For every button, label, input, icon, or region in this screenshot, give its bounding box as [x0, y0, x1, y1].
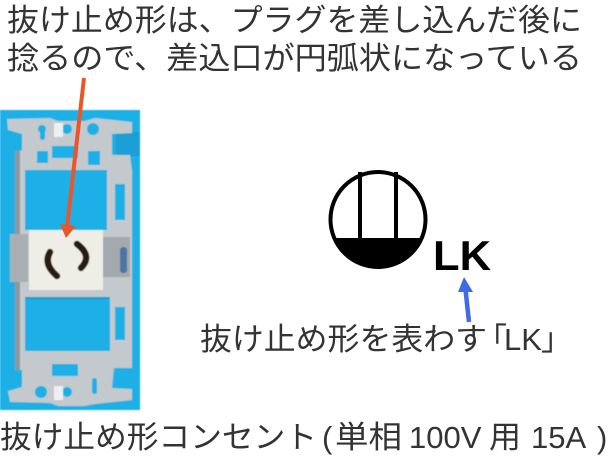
caption: outlet name and rating: 用	[489, 420, 521, 455]
caption: LK meaning: LK	[504, 322, 542, 357]
caption: LK meaning: 抜け止め形を表わす	[200, 322, 487, 357]
caption: outlet name and rating	[0, 420, 607, 455]
symbol: locking outlet circle	[330, 172, 426, 267]
heading: explanation of locking outlet: 捻るので、差込口が円弧状になっている	[7, 41, 582, 76]
arrow: orange pointing to outlet slot	[60, 78, 84, 238]
caption: outlet name and rating: )	[597, 420, 607, 455]
heading: explanation of locking outlet	[7, 3, 582, 76]
outlet face	[29, 230, 103, 290]
caption: outlet name and rating: 100V	[409, 420, 482, 455]
caption: outlet name and rating: 15A	[531, 420, 586, 455]
photo: locking outlet on mounting frame	[0, 110, 140, 410]
caption: outlet name and rating: 抜け止め形コンセント	[0, 420, 317, 455]
arc slots	[48, 252, 57, 276]
caption: LK meaning: 「	[476, 322, 507, 357]
mounting frame	[7, 118, 132, 406]
caption: LK meaning: 」	[541, 322, 572, 357]
arrow: blue pointing to LK	[458, 277, 473, 322]
heading: explanation of locking outlet: 抜け止め形は、プラグを差し込んだ後に	[7, 3, 582, 38]
caption: outlet name and rating: (	[322, 420, 333, 455]
label: LK: LK	[433, 232, 491, 279]
caption: outlet name and rating: 単相	[335, 420, 402, 455]
